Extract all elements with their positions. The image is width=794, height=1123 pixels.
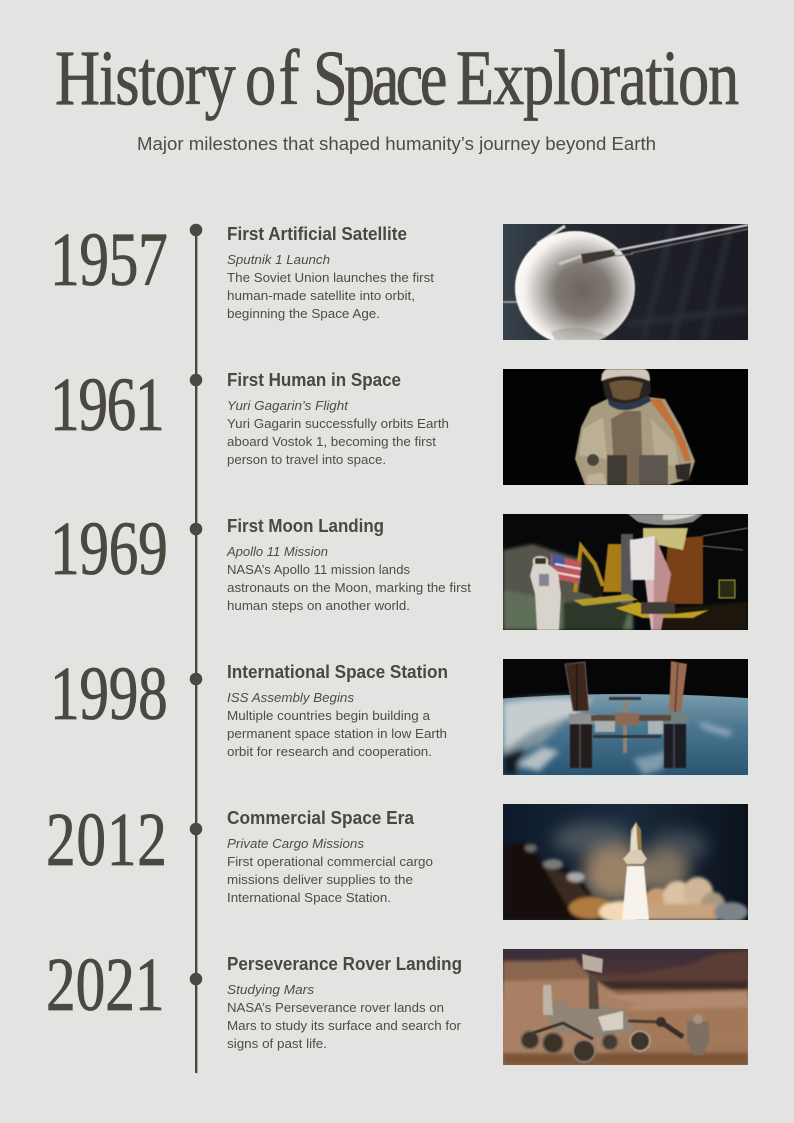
text block: Perseverance Rover Landing: NASA’s Perseverance rover lands on xyxy=(227,1000,444,1015)
image: Apollo 11 moon landing xyxy=(503,514,748,630)
text block: Commercial Space Era: missions deliver supplies to the xyxy=(227,872,413,887)
year 1957: 1957 xyxy=(50,217,168,302)
text block: First Moon Landing: human steps on another world. xyxy=(227,598,410,613)
title: Space xyxy=(313,36,447,122)
text block: First Moon Landing: First Moon Landing xyxy=(227,516,384,536)
year 2021: 2021 xyxy=(46,942,165,1027)
title: of xyxy=(245,36,300,122)
text block: First Artificial Satellite: Sputnik 1 Launch xyxy=(227,252,330,267)
text block: First Artificial Satellite: human-made satellite into orbit, xyxy=(227,288,415,303)
image: astronaut in suit xyxy=(503,369,748,485)
text block: First Human in Space: person to travel into space. xyxy=(227,452,386,467)
text block: First Artificial Satellite xyxy=(227,224,434,321)
text block: First Moon Landing: NASA’s Apollo 11 mission lands xyxy=(227,562,410,577)
text block: International Space Station: International Space Station xyxy=(227,662,448,682)
text block: First Moon Landing: Apollo 11 Mission xyxy=(226,544,328,559)
subtitle: Major milestones that shaped humanity’s journey beyond Earth xyxy=(137,134,656,154)
text block: International Space Station: permanent space station in low Earth xyxy=(227,726,447,741)
text block: Perseverance Rover Landing: Mars to study its surface and search for xyxy=(227,1018,462,1033)
text block: First Human in Space: First Human in Space xyxy=(227,370,401,390)
milestone: 2021 xyxy=(46,942,748,1065)
text block: First Moon Landing xyxy=(226,516,471,613)
year 1969: 1969 xyxy=(50,506,168,591)
text block: Perseverance Rover Landing: signs of past life. xyxy=(227,1036,327,1051)
year 1998: 1998 xyxy=(50,651,168,736)
text block: Perseverance Rover Landing xyxy=(227,954,462,1051)
milestone: 2012 xyxy=(46,797,748,923)
image: International Space Station over Earth xyxy=(503,659,748,775)
text block: First Human in Space: Yuri Gagarin’s Flight xyxy=(227,398,349,413)
text block: First Moon Landing: astronauts on the Moon, marking the first xyxy=(227,580,471,595)
milestone: 1969 xyxy=(50,506,748,630)
text block: International Space Station: ISS Assembly Begins xyxy=(227,690,355,705)
year 2012: 2012 xyxy=(46,797,167,882)
image: Perseverance rover on Mars xyxy=(503,949,748,1065)
text block: First Artificial Satellite: beginning the Space Age. xyxy=(227,306,380,321)
text block: International Space Station: Multiple countries begin building a xyxy=(227,708,431,723)
text block: First Artificial Satellite: The Soviet Union launches the first xyxy=(227,270,434,285)
image: Sputnik satellite xyxy=(503,224,748,340)
text block: Commercial Space Era xyxy=(227,808,433,905)
text block: First Artificial Satellite: First Artificial Satellite xyxy=(227,224,407,244)
milestone: 1957 xyxy=(50,217,748,346)
title xyxy=(55,36,739,122)
title: History xyxy=(55,36,236,122)
text block: Commercial Space Era: Private Cargo Missions xyxy=(227,836,365,851)
timeline axis xyxy=(190,224,202,1073)
text block: First Human in Space xyxy=(227,370,449,467)
title: Exploration xyxy=(456,36,739,122)
image: rocket launch xyxy=(503,804,748,920)
text block: Commercial Space Era: First operational commercial cargo xyxy=(227,854,433,869)
text block: Perseverance Rover Landing: Studying Mars xyxy=(227,982,315,997)
text block: International Space Station: orbit for research and cooperation. xyxy=(227,744,432,759)
text block: Commercial Space Era: Commercial Space Era xyxy=(227,808,415,828)
milestone: 1998 xyxy=(50,651,794,974)
text block: International Space Station xyxy=(227,662,448,759)
text block: Commercial Space Era: International Space Station. xyxy=(227,890,391,905)
text block: First Human in Space: aboard Vostok 1, becoming the first xyxy=(227,434,436,449)
text block: First Human in Space: Yuri Gagarin successfully orbits Earth xyxy=(227,416,449,431)
milestone: 1961 xyxy=(50,362,748,485)
year 1961: 1961 xyxy=(50,362,165,447)
text block: Perseverance Rover Landing: Perseverance Rover Landing xyxy=(227,954,462,974)
